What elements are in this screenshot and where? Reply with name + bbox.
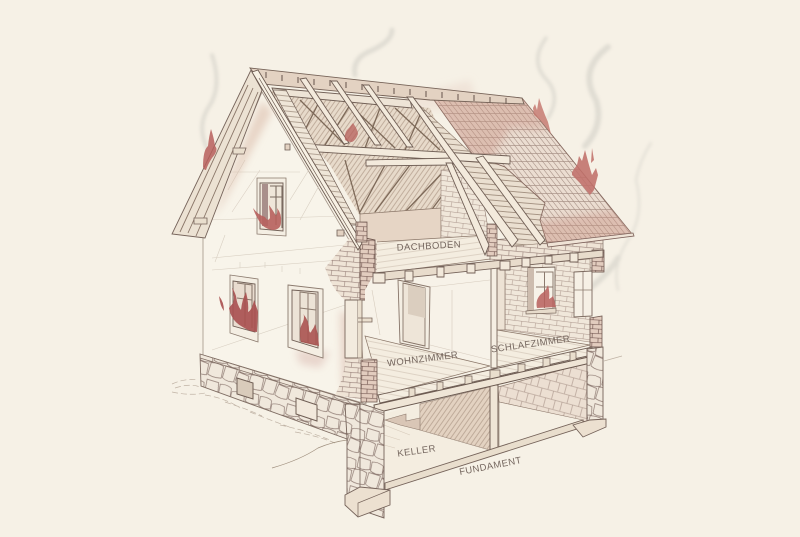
- smoke plumes: [202, 30, 651, 290]
- upper tie beams: [303, 144, 510, 164]
- basement window right: [296, 398, 317, 421]
- upper window with flames: [257, 178, 286, 236]
- flame: bedroom window: [536, 285, 556, 308]
- left timber post: [345, 300, 358, 358]
- right stone pier and footing: [573, 347, 606, 437]
- ladder strip on gable rafter: [273, 90, 358, 225]
- cellar right room stone wall: [498, 363, 587, 422]
- smoke: attic: [355, 30, 392, 75]
- flame: upper window: [253, 205, 281, 230]
- interior: upper brick walls: [325, 224, 603, 300]
- stone plinth: [200, 354, 360, 446]
- label: Keller: KELLER: [397, 443, 437, 460]
- cellar left room: [383, 387, 490, 483]
- front gable wall: [203, 92, 366, 404]
- interior: attic: [265, 90, 512, 274]
- attic brick side wall: [441, 170, 490, 240]
- left window with flames: [230, 275, 258, 342]
- attic back wall with truss hatch: [265, 90, 456, 216]
- smoke: left gable: [202, 55, 217, 148]
- floor beams: [378, 347, 592, 403]
- right corner pier: [590, 316, 602, 347]
- flame: left window: [219, 288, 258, 332]
- batten area under tiles: [417, 103, 547, 246]
- room walls: [365, 260, 492, 365]
- cellar center post: [490, 385, 498, 452]
- smoke: roof right: [585, 47, 608, 146]
- label: Wohnzimmer: WOHNZIMMER: [387, 350, 459, 369]
- soft pink washes on the tiles: [434, 100, 631, 242]
- smoke: upper window: [228, 168, 252, 210]
- eaves board: [547, 233, 634, 247]
- flame: middle window: [300, 314, 319, 346]
- label: Fundament: FUNDAMENT: [458, 455, 523, 478]
- right wall top bricks: [490, 232, 603, 274]
- smoke: middle window: [305, 218, 328, 285]
- rafter head blocks: [285, 144, 344, 236]
- cellar right room floor: [499, 402, 583, 447]
- inclined rafters: [300, 78, 413, 147]
- flame: roof top: [533, 98, 551, 134]
- gable front rafter: [252, 70, 362, 250]
- right wall window cross-section: [574, 271, 592, 317]
- attic floor: [360, 235, 491, 274]
- roof tiles: [427, 90, 632, 243]
- label: Dachboden: DACHBODEN: [396, 239, 461, 254]
- Wohnzimmer floor: [365, 336, 490, 396]
- interior door: [398, 280, 430, 349]
- left gable cut bricks: [325, 235, 377, 300]
- smoke: roof top: [538, 38, 554, 118]
- panel: Schlafzimmer room: [491, 250, 604, 368]
- center partition: [491, 264, 497, 368]
- back brick wall: [505, 259, 590, 342]
- basement window left: [237, 378, 253, 399]
- attic floor joists: [373, 250, 603, 283]
- ground sketch: yard path and terrain lines: [172, 356, 622, 468]
- label: Schlafzimmer: SCHLAFZIMMER: [490, 334, 571, 356]
- left roof slope strip: [172, 70, 262, 238]
- smoke: left window: [220, 235, 232, 280]
- smoke: bedroom window far right: [616, 143, 651, 290]
- flame: left gable: [203, 129, 216, 170]
- faint pencil construction lines on wall: [206, 160, 345, 350]
- bedroom window: [528, 267, 555, 311]
- Schlafzimmer floor: [497, 330, 590, 367]
- ridge with batten ends: [250, 68, 524, 104]
- purlin top: [272, 88, 412, 108]
- flame: attic: [345, 123, 358, 142]
- foundation strip: [385, 420, 583, 490]
- stone corner pillar and footing: [345, 404, 390, 518]
- middle window with flames: [288, 285, 323, 358]
- roof: [172, 68, 640, 255]
- flame: roof right: [572, 148, 598, 195]
- panel: Wohnzimmer room: [335, 260, 492, 402]
- wash shadows on wall: [212, 80, 480, 395]
- lower pier: [335, 358, 378, 402]
- flames: [203, 98, 598, 346]
- cellar: [374, 347, 595, 490]
- room labels: [387, 239, 571, 478]
